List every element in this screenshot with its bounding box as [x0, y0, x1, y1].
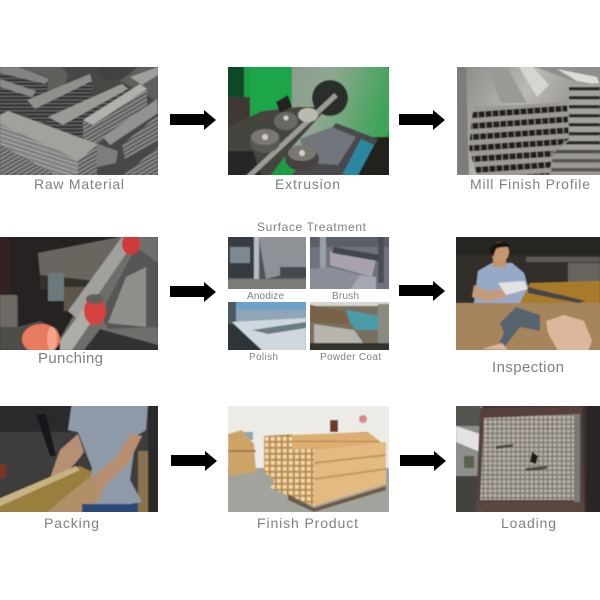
- step: loading: [452, 402, 600, 531]
- label: punching: Punching: [38, 350, 103, 367]
- photo: brush: [310, 237, 389, 289]
- arrow: punching to surface treatment: [170, 282, 216, 302]
- photo: wrapped finished goods: [228, 406, 389, 512]
- arrow: finish product to loading: [400, 451, 446, 471]
- photo: anodize: [228, 237, 306, 289]
- photo: loaded container: [456, 406, 600, 512]
- step: raw material: [0, 63, 162, 192]
- step: inspection: [452, 233, 600, 376]
- photo: worker packing profiles: [0, 406, 158, 512]
- photo: powder coat: [310, 302, 389, 350]
- photo: aluminium profile ends: [457, 67, 600, 175]
- label: packing: Packing: [44, 515, 99, 531]
- photo: polish: [228, 302, 306, 350]
- step: punching: [0, 233, 162, 367]
- arrow: surface treatment to inspection: [399, 281, 445, 301]
- panel: surface treatment: [224, 220, 394, 363]
- photo: stacked aluminium bars: [0, 67, 158, 175]
- label: loading: Loading: [501, 515, 556, 531]
- label: inspection: Inspection: [492, 359, 564, 376]
- label: anodize: Anodize: [247, 291, 284, 302]
- step: packing: [0, 402, 162, 531]
- step: mill finish profile: [453, 63, 600, 192]
- photo: punching machine: [0, 237, 158, 350]
- label: polish: Polish: [249, 352, 278, 363]
- label: raw material: Raw Material: [34, 176, 124, 192]
- photo: inspector and caliper: [456, 237, 600, 350]
- photo: extrusion press: [228, 67, 389, 175]
- heading: surface treatment: Surface Treatment: [257, 220, 367, 234]
- label: mill finish profile: Mill Finish Profile: [470, 176, 590, 192]
- arrow: raw material to extrusion: [170, 110, 216, 130]
- label: finish product: Finish Product: [257, 515, 358, 531]
- arrow: packing to finish product: [171, 451, 217, 471]
- arrow: extrusion to mill finish profile: [399, 110, 445, 130]
- label: brush: Brush: [332, 291, 359, 302]
- label: powder coat: Powder Coat: [320, 352, 381, 363]
- label: extrusion: Extrusion: [275, 176, 340, 192]
- step: extrusion: [224, 34, 396, 192]
- step: finish product: [224, 402, 394, 531]
